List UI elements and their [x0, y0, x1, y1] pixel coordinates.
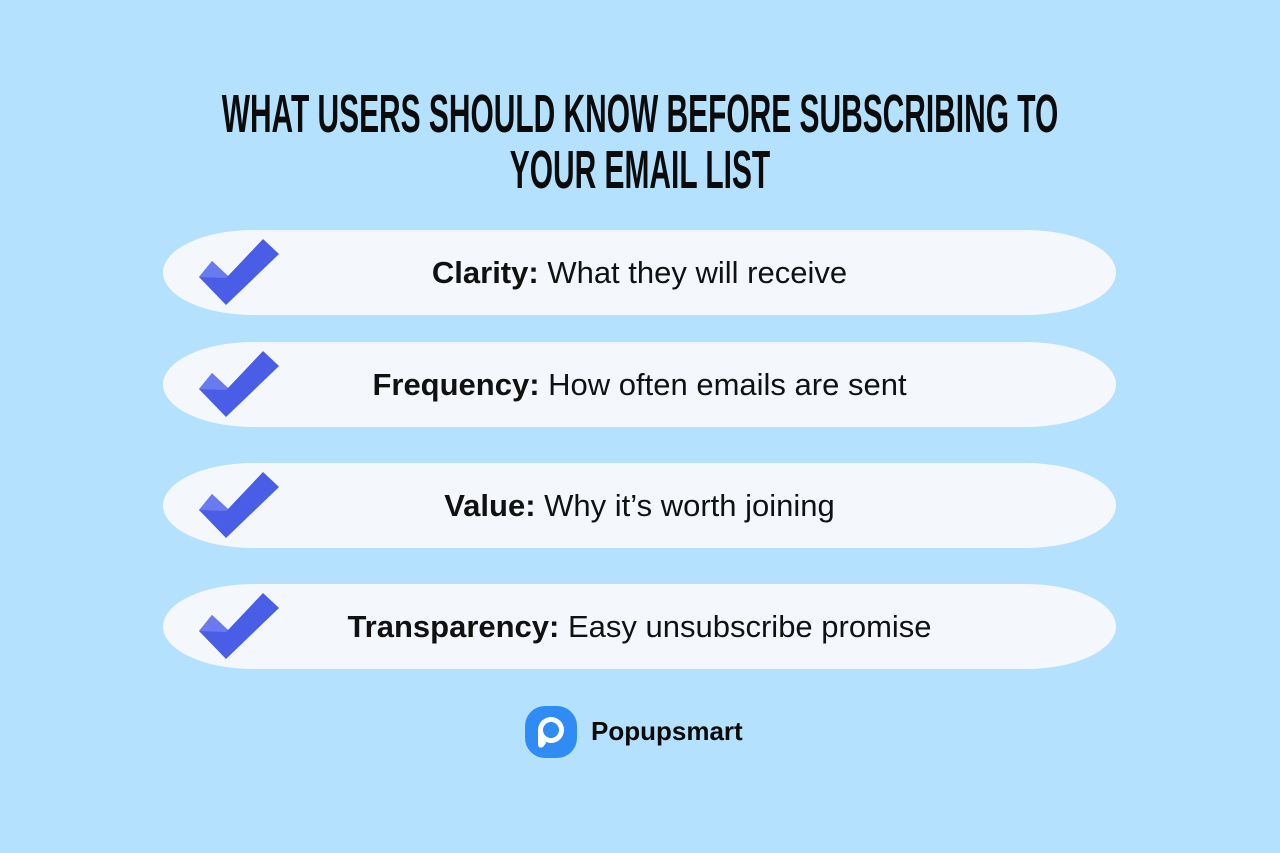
icon: checkmark: [199, 239, 279, 305]
logo: Popupsmart: Popupsmart: [591, 716, 743, 746]
text: value: Value: Why it’s worth joining: [444, 488, 835, 523]
title: WHAT USERS SHOULD KNOW BEFORE SUBSCRIBING TO: [222, 84, 1058, 144]
icon: checkmark: [199, 472, 279, 538]
panel: clarity: [163, 230, 1116, 315]
text: transparency: Transparency: Easy unsubscribe promise: [347, 609, 932, 644]
icon: checkmark: [199, 351, 279, 417]
panel: frequency: [163, 342, 1116, 427]
title: YOUR EMAIL LIST: [510, 140, 770, 200]
logo: Popupsmart: [525, 706, 743, 758]
icon: checkmark: [199, 593, 279, 659]
text: frequency: Frequency: How often emails are sent: [372, 367, 907, 402]
panel: value: [163, 463, 1116, 548]
panel: transparency: [163, 584, 1116, 669]
title: [222, 84, 1058, 200]
text: clarity: Clarity: What they will receive: [432, 255, 847, 290]
